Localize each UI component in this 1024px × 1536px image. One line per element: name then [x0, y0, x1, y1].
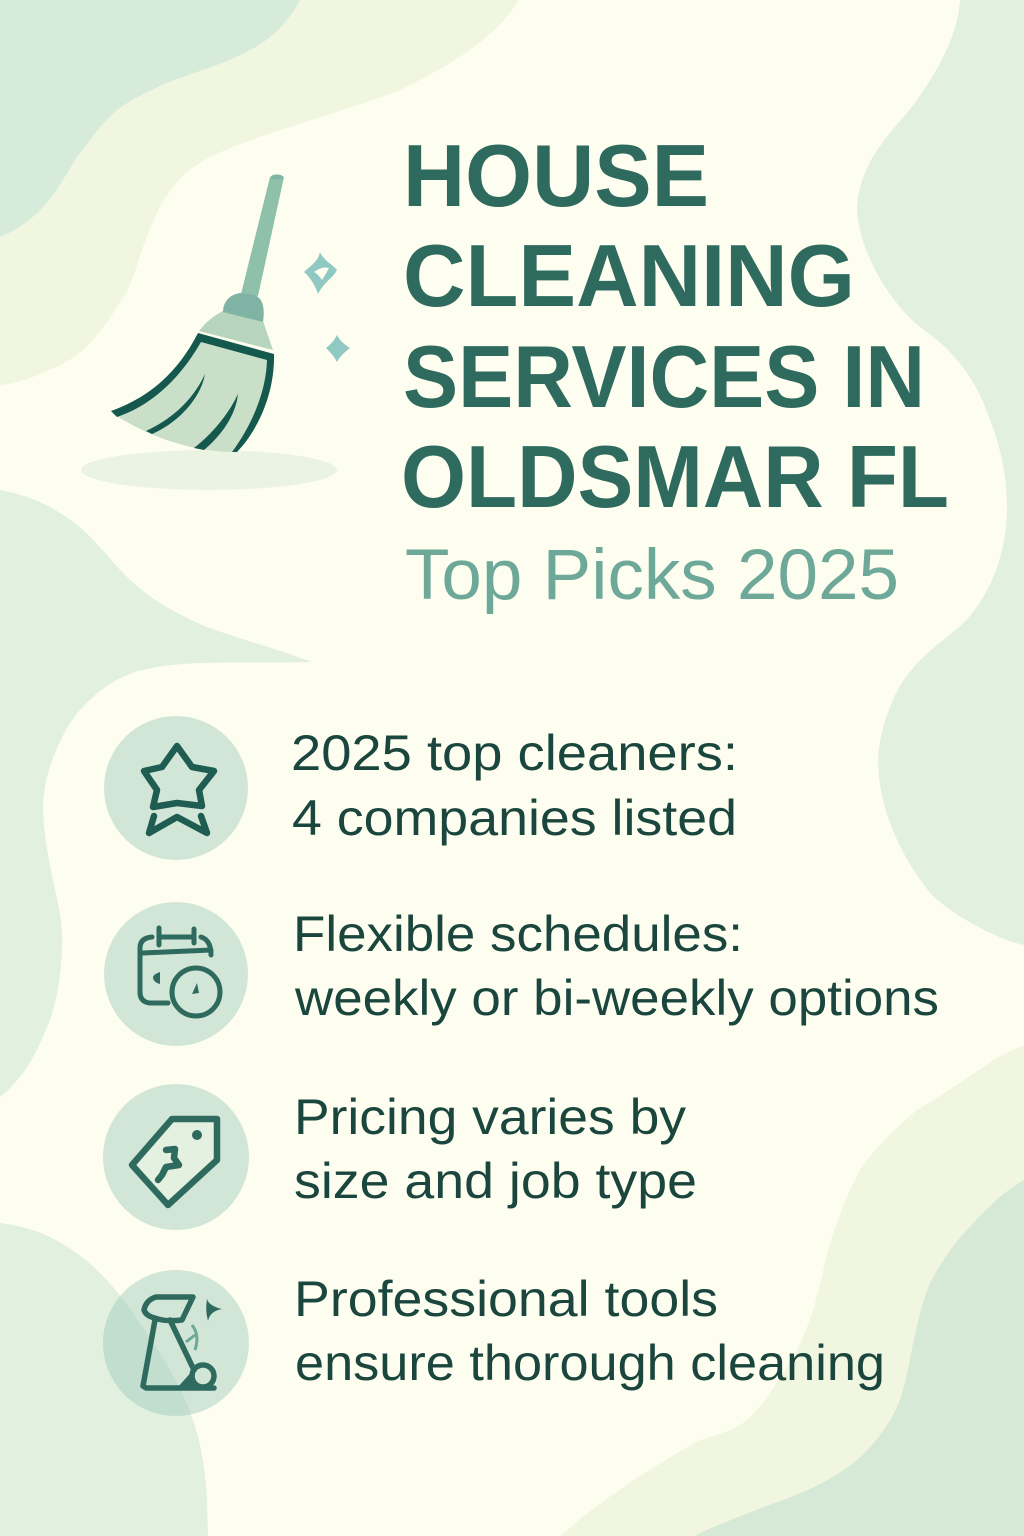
text: pricing: size and job type — [294, 1153, 697, 1209]
icon: price tag — [103, 1084, 249, 1230]
title: SERVICES IN — [403, 327, 925, 426]
background wave: bottom right light — [560, 1045, 1024, 1536]
sparkle: lower — [326, 335, 350, 362]
broom outline and bristle lines — [111, 333, 274, 452]
subtitle: Top Picks 2025 — [405, 536, 899, 615]
item 1: top cleaners — [104, 716, 738, 860]
sparkle: upper — [304, 252, 337, 294]
title: OLDSMAR FL — [401, 427, 949, 526]
icon: calendar and clock — [104, 902, 248, 1046]
background wave: bottom left — [0, 1223, 208, 1536]
broom floor shadow — [81, 450, 337, 490]
illustration: broom — [81, 174, 350, 490]
text: top cleaners: 2025 top cleaners: — [291, 725, 738, 781]
background wave: bottom right dark — [695, 1180, 1024, 1536]
text: flexible schedules — [293, 906, 939, 1026]
item 2: flexible schedules — [104, 902, 939, 1046]
item 3: pricing — [103, 1084, 697, 1230]
text: top cleaners: 4 companies listed — [292, 790, 737, 846]
text: professional tools — [294, 1271, 885, 1391]
broom handle cap — [271, 174, 283, 180]
text: flexible schedules: weekly or bi-weekly options — [294, 970, 939, 1026]
icon: star badge — [104, 716, 248, 860]
background wave: left — [0, 490, 312, 1097]
title: HOUSE — [403, 126, 709, 225]
background wave: top left dark — [0, 0, 300, 237]
broom handle — [241, 175, 284, 296]
background wave: right — [857, 0, 1024, 945]
text: flexible schedules: Flexible schedules: — [293, 906, 743, 962]
text: top cleaners — [291, 725, 738, 846]
broom bristles — [112, 336, 271, 452]
broom ferrule — [223, 293, 264, 322]
text: professional tools: Professional tools — [294, 1271, 718, 1327]
title — [401, 126, 949, 526]
item 4: professional tools — [103, 1270, 882, 1416]
background wave: top left light — [0, 0, 519, 385]
icon: spray bottle — [103, 1270, 249, 1416]
text: professional tools: ensure thorough cleaning — [295, 1335, 885, 1391]
text: pricing: Pricing varies by — [294, 1089, 686, 1145]
broom collar — [199, 311, 273, 350]
text: pricing — [294, 1089, 697, 1209]
title: CLEANING — [403, 226, 855, 325]
